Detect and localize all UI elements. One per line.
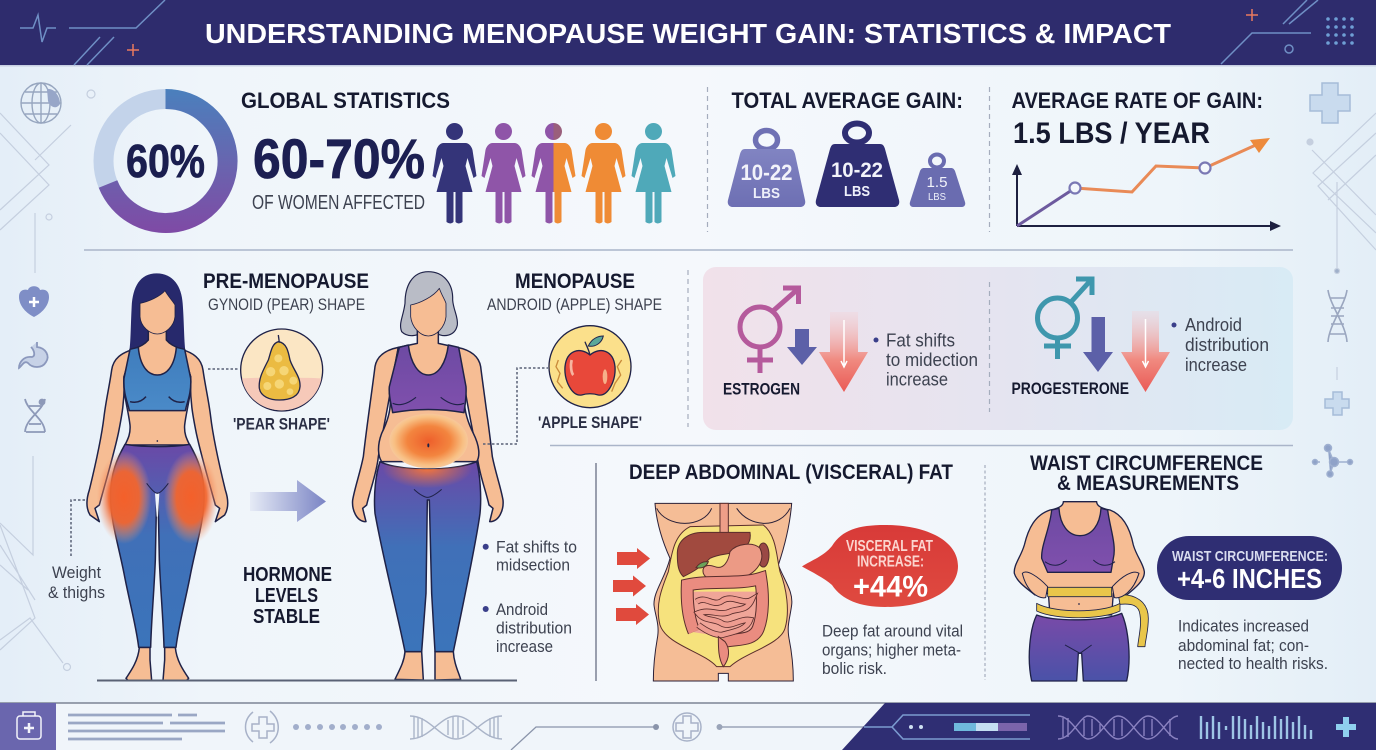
bullet text: android distribution increase: increase	[496, 637, 553, 656]
icon: dna footer right	[1058, 716, 1178, 739]
panel: pre-menopause	[48, 270, 369, 681]
bullet text: estrogen	[874, 330, 978, 390]
text block: hormone levels stable: STABLE	[253, 606, 320, 628]
subheading: gynoid shape: GYNOID (PEAR) SHAPE	[208, 295, 365, 314]
audio bars	[1201, 716, 1311, 739]
footer block right	[842, 703, 1376, 750]
heading: menopause: MENOPAUSE	[515, 270, 635, 293]
callout: visceral fat increase: VISCERAL FAT	[846, 538, 933, 555]
illustration: abdomen organs	[653, 503, 793, 681]
text block: deep fat description: organs; higher meta-	[822, 642, 961, 660]
heading: global statistics: GLOBAL STATISTICS	[241, 88, 450, 113]
pill: waist circumference stat: +4-6 INCHES	[1177, 563, 1322, 594]
icon: apple shape circle	[549, 326, 631, 408]
icon: weight 10-22 lbs dark	[816, 124, 899, 207]
panel: total average gain	[728, 88, 965, 207]
heading: waist circumference and measurements: WAIST CIRCUMFERENCE	[1030, 452, 1263, 475]
background circuit lines	[0, 90, 1376, 670]
icon: progesterone symbol	[1038, 279, 1092, 359]
icon: circled plus	[246, 711, 278, 743]
panel: menopause	[353, 270, 662, 680]
heading: deep abdominal visceral fat: DEEP ABDOMINAL (VISCERAL) FAT	[629, 461, 953, 484]
icon: weight 10-22 lbs light	[728, 130, 805, 207]
figure: pre-menopause body	[87, 273, 228, 681]
bullet text: android distribution increase: Android	[496, 600, 548, 619]
heading: average rate of gain: AVERAGE RATE OF GAIN:	[1012, 88, 1263, 113]
icon: footer plus	[1336, 717, 1356, 737]
icon: weight 1.5 lbs: LBS	[928, 192, 946, 203]
line chart	[1012, 138, 1281, 231]
icon: small down arrow	[1083, 317, 1113, 372]
label: apple shape: 'APPLE SHAPE'	[538, 413, 642, 432]
icon: weight 1.5 lbs: 1.5	[926, 174, 948, 191]
label: pear shape: 'PEAR SHAPE'	[233, 414, 330, 434]
text block: hormone levels stable: HORMONE	[243, 564, 332, 586]
donut chart 60%: 60%	[126, 135, 205, 187]
icon: estrogen symbol	[740, 288, 798, 373]
header decoration left	[20, 0, 165, 65]
icon: medical heart	[19, 286, 49, 317]
icon: dna footer	[410, 716, 502, 739]
title: UNDERSTANDING MENOPAUSE WEIGHT GAIN: STATISTICS & IMPACT	[205, 18, 1171, 49]
icon: weight 10-22 lbs dark: LBS	[844, 183, 870, 200]
bullet text: progesterone: increase	[1185, 355, 1247, 375]
donut chart 60%	[104, 99, 228, 223]
label: weight and thighs: & thighs	[48, 583, 105, 602]
bullet text: estrogen: increase	[886, 370, 948, 390]
footer text lines	[68, 715, 225, 739]
big stat 1.5 lbs per year: 1.5 LBS / YEAR	[1013, 117, 1210, 150]
footer dots	[293, 724, 382, 730]
bullet text: estrogen: Fat shifts	[886, 330, 955, 350]
text block: hormone levels stable	[243, 564, 332, 628]
footer band	[0, 703, 1376, 750]
heading: waist circumference and measurements: & MEASUREMENTS	[1057, 472, 1239, 495]
icon: dna right	[1328, 290, 1347, 342]
panel: global statistics	[104, 88, 676, 224]
text block: deep fat description: Deep fat around vital	[822, 622, 963, 640]
icon: small down arrow	[787, 329, 817, 365]
text block: waist description: abdominal fat; con-	[1178, 637, 1309, 655]
footer block left	[0, 703, 56, 750]
tech bracket	[864, 715, 1030, 739]
callout: visceral fat increase	[802, 525, 958, 607]
text block: hormone levels stable: LEVELS	[255, 585, 318, 607]
bullet text: progesterone	[1172, 315, 1269, 375]
progesterone section	[1012, 279, 1269, 398]
callout: visceral fat increase: +44%	[853, 570, 928, 604]
bullet text: progesterone: distribution	[1185, 335, 1269, 355]
icon: red arrows	[613, 548, 650, 625]
text block: deep fat description: bolic risk.	[822, 660, 887, 678]
bullet text: progesterone: Android	[1185, 315, 1242, 335]
icon: weight 10-22 lbs light: LBS	[753, 185, 780, 202]
panel: waist circumference	[1014, 452, 1342, 681]
subheading: android shape: ANDROID (APPLE) SHAPE	[487, 295, 662, 314]
icon: stomach	[19, 342, 48, 368]
icon: small cross right	[1325, 392, 1349, 415]
label: progesterone: PROGESTERONE	[1012, 379, 1129, 398]
text block: deep fat description	[822, 622, 963, 678]
bullet text: android distribution increase	[483, 600, 572, 656]
caption: of women affected: OF WOMEN AFFECTED	[252, 192, 425, 214]
icon: large down arrow	[819, 312, 868, 392]
heading: waist circumference and measurements	[1030, 452, 1263, 495]
illustration: waist with tape	[1014, 502, 1148, 681]
arrow: pre to menopause	[250, 480, 326, 522]
bullet text: fat shifts to midsection: midsection	[496, 556, 570, 574]
text block: waist description	[1178, 618, 1328, 673]
bullet text: android distribution increase: distribution	[496, 618, 572, 638]
icon: medical cross top right	[1310, 83, 1350, 123]
pill: waist circumference stat	[1157, 536, 1342, 600]
heading: total average gain: TOTAL AVERAGE GAIN:	[732, 88, 963, 113]
icon: weight 1.5 lbs	[910, 154, 965, 207]
figure: menopause body	[353, 272, 503, 680]
icon: weight 10-22 lbs light: 10-22	[740, 160, 792, 185]
heading: pre-menopause: PRE-MENOPAUSE	[203, 270, 369, 293]
circuit line	[511, 727, 656, 750]
icon: globe	[21, 83, 61, 123]
callout: visceral fat increase: INCREASE:	[857, 554, 924, 570]
bullet text: estrogen: to midection	[886, 350, 978, 370]
big stat 60-70%: 60-70%	[253, 127, 425, 190]
panel: average rate of gain	[1012, 88, 1281, 231]
pill: waist circumference stat: WAIST CIRCUMFERENCE:	[1172, 548, 1328, 565]
icon: weight 10-22 lbs dark: 10-22	[831, 159, 883, 182]
panel: hormones	[703, 267, 1293, 430]
label: weight and thighs: Weight	[52, 563, 101, 582]
label: estrogen: ESTROGEN	[723, 380, 800, 398]
estrogen section	[723, 288, 978, 398]
icon: medical kit	[17, 712, 41, 739]
icon: pear shape circle	[241, 329, 323, 411]
icon: dna left	[25, 399, 45, 432]
bullet text: fat shifts to midsection	[483, 538, 577, 574]
icon: circled plus 2	[673, 713, 701, 741]
panel: visceral fat	[613, 461, 963, 681]
bullet text: fat shifts to midsection: Fat shifts to	[496, 538, 577, 556]
icon row: five women	[432, 123, 676, 224]
header banner	[0, 0, 1376, 66]
label: weight and thighs	[48, 563, 105, 602]
icon: molecule	[1312, 444, 1352, 477]
header decoration right	[1221, 0, 1354, 64]
text block: waist description: nected to health risks.	[1178, 655, 1328, 673]
text block: waist description: Indicates increased	[1178, 618, 1309, 636]
icon: large down arrow	[1121, 311, 1170, 392]
